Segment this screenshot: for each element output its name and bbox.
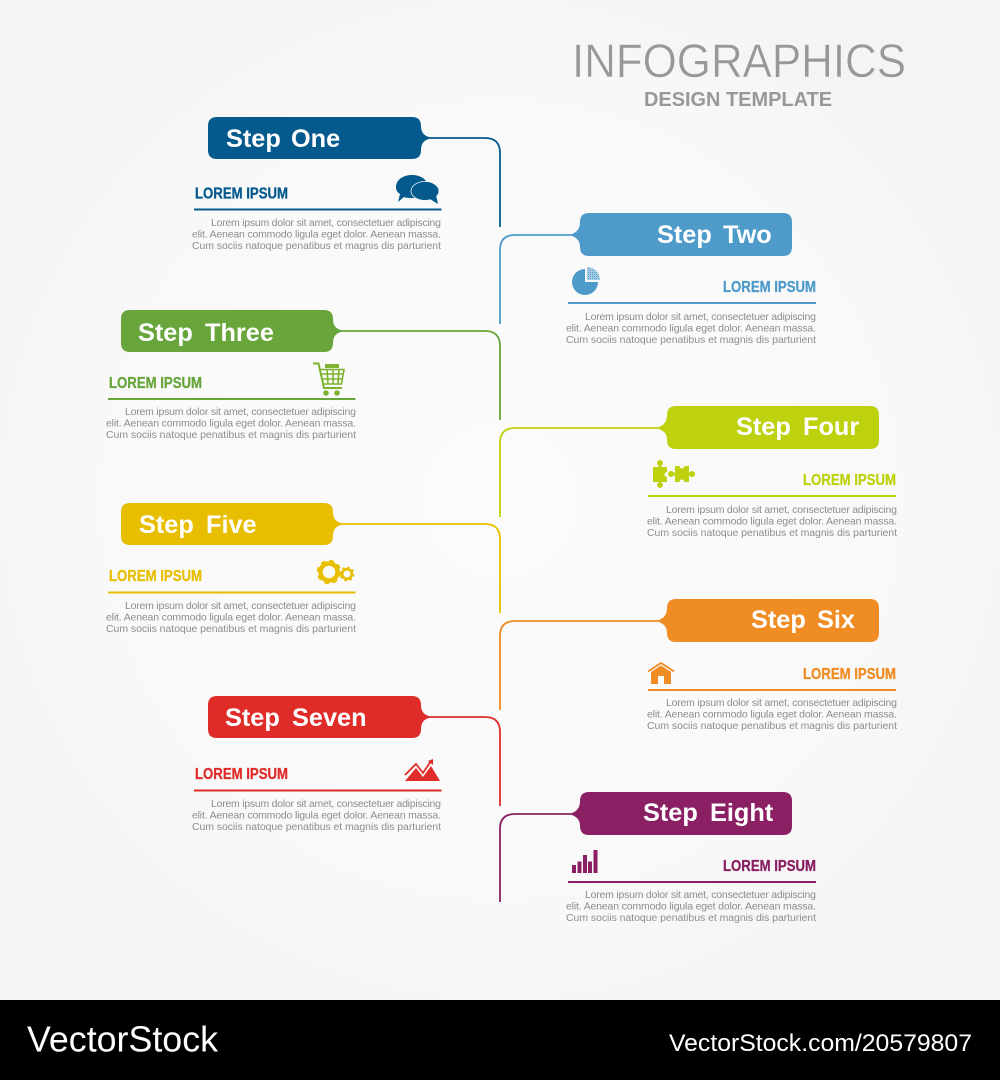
panel: step one (192, 117, 500, 252)
step five body text: Cum sociis natoque penatibus et magnis dis parturient (106, 623, 356, 635)
icon: house (648, 663, 674, 684)
step four label: Step (736, 413, 791, 441)
icon: shopping cart (313, 364, 344, 396)
step eight heading: LOREM IPSUM (723, 858, 816, 875)
footer watermark bar: VectorStock.com/20579807 (669, 1030, 972, 1057)
connector line: step two (500, 235, 575, 324)
connector line: step five (338, 524, 500, 613)
step four label: Four (803, 413, 859, 441)
connector line: step three (338, 331, 500, 420)
step two heading: LOREM IPSUM (723, 279, 816, 296)
step two pill (572, 213, 792, 256)
step two label: Two (723, 221, 772, 249)
step one heading: LOREM IPSUM (195, 186, 288, 202)
step five body text: elit. Aenean commodo ligula eget dolor. Aenean massa. (106, 612, 356, 624)
step three label: Step (138, 319, 193, 347)
connector line: step one (425, 138, 500, 227)
step six body text: Lorem ipsum dolor sit amet, consectetuer adipiscing (666, 697, 897, 709)
step two body text: Cum sociis natoque penatibus et magnis dis parturient (566, 334, 816, 346)
step eight body text: elit. Aenean commodo ligula eget dolor. Aenean massa. (566, 900, 816, 912)
step four body text (647, 504, 897, 539)
panel: step seven (192, 696, 500, 833)
step one body text: elit. Aenean commodo ligula eget dolor. Aenean massa. (192, 228, 441, 240)
icon: speech bubbles (396, 175, 439, 204)
step one pill (208, 117, 429, 159)
step three label: Three (205, 319, 274, 347)
step five body text (106, 600, 356, 635)
step five body text: Lorem ipsum dolor sit amet, consectetuer adipiscing (125, 600, 356, 612)
footer watermark bar: VectorStock (27, 1018, 219, 1060)
step seven pill (208, 696, 429, 738)
step one body text (192, 217, 441, 252)
step seven body text (192, 798, 441, 833)
step four pill (659, 406, 879, 449)
step six heading: LOREM IPSUM (803, 666, 896, 683)
step six pill (659, 599, 879, 642)
panel: step six (500, 599, 897, 732)
step four body text: Lorem ipsum dolor sit amet, consectetuer adipiscing (666, 504, 897, 516)
title: DESIGN TEMPLATE (644, 89, 832, 111)
panel: step five (106, 503, 500, 635)
step seven label: Step (225, 704, 280, 732)
step two body text (566, 311, 816, 346)
panel: step four (500, 406, 897, 539)
step six body text (647, 697, 897, 732)
title (572, 34, 906, 111)
step six label: Step (751, 606, 806, 634)
step four body text: Cum sociis natoque penatibus et magnis dis parturient (647, 527, 897, 539)
step four heading: LOREM IPSUM (803, 472, 896, 489)
panel: step two (500, 213, 816, 346)
step four body text: elit. Aenean commodo ligula eget dolor. Aenean massa. (647, 516, 897, 528)
step seven body text: Cum sociis natoque penatibus et magnis dis parturient (192, 821, 441, 833)
step five label: Step (139, 511, 194, 539)
footer watermark bar (0, 1000, 1000, 1080)
step six body text: elit. Aenean commodo ligula eget dolor. Aenean massa. (647, 708, 897, 720)
step eight pill (572, 792, 792, 835)
step three heading: LOREM IPSUM (109, 375, 202, 392)
icon: bar chart (572, 850, 598, 873)
panel: step eight (500, 792, 816, 924)
step three body text: elit. Aenean commodo ligula eget dolor. Aenean massa. (106, 418, 356, 430)
step seven body text: elit. Aenean commodo ligula eget dolor. Aenean massa. (192, 810, 441, 822)
step three body text: Cum sociis natoque penatibus et magnis dis parturient (106, 429, 356, 441)
step seven body text: Lorem ipsum dolor sit amet, consectetuer adipiscing (211, 798, 441, 810)
connector line: step seven (425, 717, 500, 806)
step eight body text: Cum sociis natoque penatibus et magnis dis parturient (566, 912, 816, 924)
step eight body text (566, 889, 816, 924)
step six label: Six (817, 606, 855, 634)
icon: line and area chart (405, 759, 440, 781)
connector line: step eight (500, 814, 575, 902)
step one label: Step (226, 125, 281, 153)
step three body text: Lorem ipsum dolor sit amet, consectetuer adipiscing (125, 406, 356, 418)
step eight label: Eight (710, 799, 774, 827)
step one body text: Lorem ipsum dolor sit amet, consectetuer adipiscing (211, 217, 441, 229)
step eight label: Step (643, 799, 698, 827)
step five label: Five (206, 511, 257, 539)
icon: puzzle pieces (653, 460, 695, 488)
step two body text: elit. Aenean commodo ligula eget dolor. Aenean massa. (566, 322, 816, 334)
icon: pie chart (572, 267, 600, 295)
title: INFOGRAPHICS (572, 34, 906, 87)
connector line: step four (500, 428, 662, 517)
icon: gears (318, 561, 354, 583)
step eight body text: Lorem ipsum dolor sit amet, consectetuer adipiscing (585, 889, 816, 901)
step one body text: Cum sociis natoque penatibus et magnis dis parturient (192, 240, 441, 252)
step two label: Step (657, 221, 712, 249)
step three body text (106, 406, 356, 441)
step five pill (121, 503, 341, 545)
step seven label: Seven (292, 704, 367, 732)
step seven heading: LOREM IPSUM (195, 766, 288, 783)
step two body text: Lorem ipsum dolor sit amet, consectetuer adipiscing (585, 311, 816, 323)
step six body text: Cum sociis natoque penatibus et magnis dis parturient (647, 720, 897, 732)
panel: step three (106, 310, 500, 441)
connector line: step six (500, 621, 662, 710)
step three pill (121, 310, 341, 352)
step one label: One (291, 125, 340, 153)
step five heading: LOREM IPSUM (109, 568, 202, 585)
